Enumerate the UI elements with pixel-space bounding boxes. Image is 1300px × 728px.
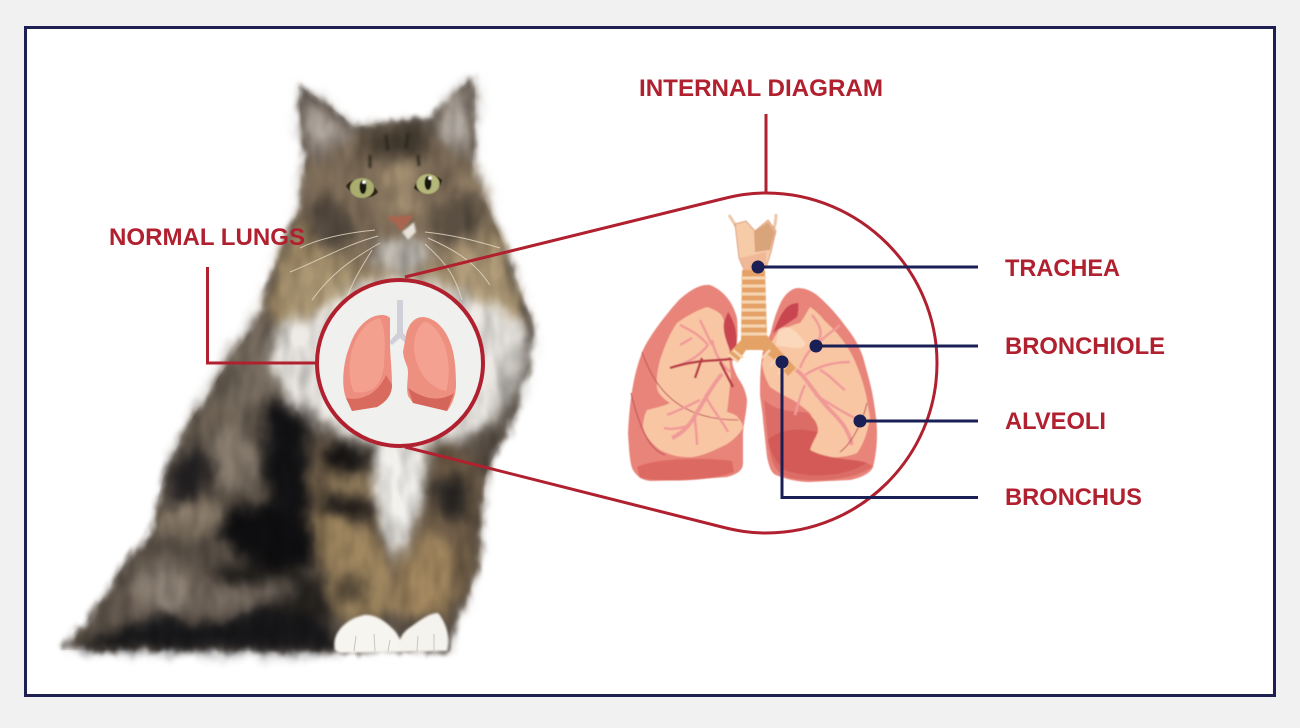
paw toe lines — [354, 634, 434, 651]
trachea rings — [728, 270, 796, 376]
label: bronchus: BRONCHUS — [1005, 484, 1142, 511]
muzzle highlight — [402, 222, 416, 240]
dark leg stripes — [318, 446, 372, 470]
heading: internal diagram: INTERNAL DIAGRAM — [639, 75, 883, 102]
white paws — [334, 613, 448, 653]
larynx — [729, 214, 776, 272]
internal lungs illustration — [628, 214, 877, 482]
left lung — [628, 285, 747, 481]
internal diagram leader line — [764, 114, 768, 193]
magnifier connector and internal diagram bubble — [405, 193, 937, 533]
normal lungs leader line — [208, 267, 318, 363]
label: trachea: TRACHEA — [1005, 255, 1120, 282]
forehead dark — [360, 128, 428, 162]
right lung — [760, 288, 877, 482]
cat nose — [386, 215, 414, 231]
white chest strip — [372, 445, 428, 563]
cat silhouette base — [62, 76, 534, 652]
chin and jowl — [372, 240, 432, 274]
small right lung — [403, 317, 456, 411]
normal lungs circle — [317, 280, 483, 446]
cat eyes — [346, 174, 442, 198]
cheeks dark — [308, 195, 358, 250]
tail — [110, 555, 228, 635]
fur grain — [50, 70, 550, 660]
pointer: trachea — [752, 260, 978, 274]
label: bronchiole: BRONCHIOLE — [1005, 333, 1165, 360]
pointer: bronchus — [776, 356, 978, 498]
head base — [303, 127, 490, 272]
cat photo illustration — [50, 70, 550, 660]
cat whiskers — [290, 230, 500, 305]
pointer: bronchiole — [810, 340, 978, 352]
small trachea icon — [389, 300, 411, 345]
right head tan — [440, 170, 495, 258]
nose bridge light — [385, 165, 418, 212]
white bib — [270, 278, 528, 446]
forehead stripes — [370, 134, 419, 168]
haunch dark patches — [203, 506, 314, 570]
flank mid tones — [165, 315, 285, 510]
heading: normal lungs: NORMAL LUNGS — [109, 224, 305, 251]
pointer: alveoli — [854, 414, 978, 428]
small left lung — [343, 315, 392, 411]
haunch light patches — [163, 498, 228, 540]
leg bases — [305, 440, 394, 620]
label: alveoli: ALVEOLI — [1005, 408, 1106, 435]
left bronchial tree — [664, 320, 730, 445]
right bronchial tree — [795, 315, 855, 445]
ears — [298, 88, 358, 165]
ruff tan — [262, 212, 530, 335]
